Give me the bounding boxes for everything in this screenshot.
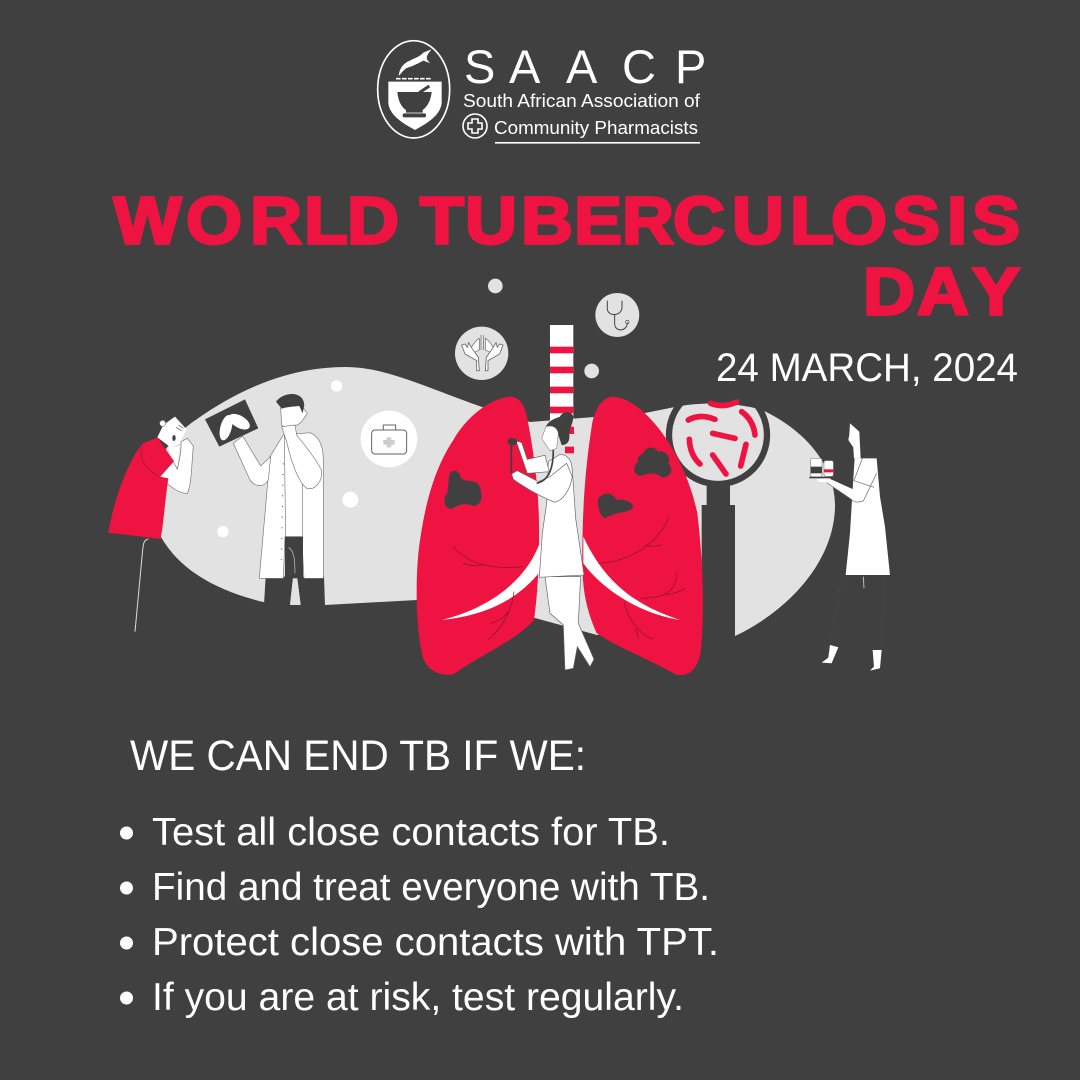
white dots — [217, 380, 358, 537]
patient hair — [167, 400, 204, 421]
pharmacist feet — [822, 645, 882, 671]
doctor dress — [539, 454, 584, 577]
logo subtitle line 2: Community Pharmacists — [494, 117, 698, 138]
doctor arms — [233, 436, 271, 486]
bullet 3: Protect close contacts with TPT. — [152, 921, 719, 964]
right lung bronchi — [583, 537, 680, 620]
bullet 4: If you are at risk, test regularly. — [152, 976, 684, 1019]
x-ray sheet — [205, 399, 258, 447]
list heading: WE CAN END TB IF WE: — [130, 733, 586, 780]
medicine jars — [809, 458, 833, 478]
patient leg line — [135, 539, 148, 632]
bacteria — [688, 402, 755, 474]
title: DAY — [863, 254, 1020, 329]
doctor face — [542, 426, 558, 451]
doctor upper arm and hand — [516, 441, 549, 473]
doctor hair — [545, 412, 573, 445]
title: WORLD TUBERCULOSIS — [114, 183, 1020, 258]
doctor lower arm and hand — [512, 463, 572, 502]
icon: stethoscope — [595, 293, 639, 337]
pharmacist legs — [830, 577, 885, 650]
logo emblem — [378, 41, 450, 138]
background blob — [151, 367, 835, 636]
left lung lesion — [444, 471, 482, 509]
floating dots — [488, 279, 503, 293]
logo cross icon — [463, 114, 487, 138]
patient head — [157, 417, 187, 447]
pharmacist arm — [817, 473, 877, 502]
right lung lesion lower — [598, 494, 633, 518]
pharmacist with medicine — [809, 423, 890, 671]
bullet 2: Find and treat everyone with TB. — [152, 866, 710, 909]
right lung — [582, 397, 703, 675]
left lung — [417, 397, 542, 675]
doctor with x-ray — [205, 394, 325, 605]
icon: hands holding lungs — [455, 327, 508, 380]
logo wordmark: SAACP — [464, 40, 706, 93]
coughing patient — [108, 400, 204, 632]
bullet 1: Test all close contacts for TB. — [152, 811, 670, 854]
doctor coat — [259, 433, 323, 578]
stethoscope — [511, 445, 553, 483]
logo subtitle line 1: South African Association of — [463, 90, 701, 111]
title — [114, 183, 1020, 329]
SAACP logo — [378, 40, 706, 144]
patient arm — [168, 446, 180, 467]
left lung bronchi — [442, 537, 542, 620]
trachea — [550, 325, 574, 453]
medical kit icon — [217, 380, 417, 537]
doctor legs — [545, 577, 594, 670]
right lung lesion upper — [634, 447, 671, 477]
magnifying glass with bacteria — [669, 386, 767, 648]
bullet list — [120, 811, 719, 1019]
date: 24 MARCH, 2024 — [716, 346, 1018, 390]
female doctor with stethoscope — [507, 412, 594, 670]
lungs illustration — [417, 279, 703, 675]
pharmacist dress — [846, 458, 890, 575]
pharmacist head — [848, 423, 861, 458]
doctor head — [281, 403, 307, 427]
doctor trousers — [264, 560, 325, 605]
patient shirt — [108, 438, 174, 539]
